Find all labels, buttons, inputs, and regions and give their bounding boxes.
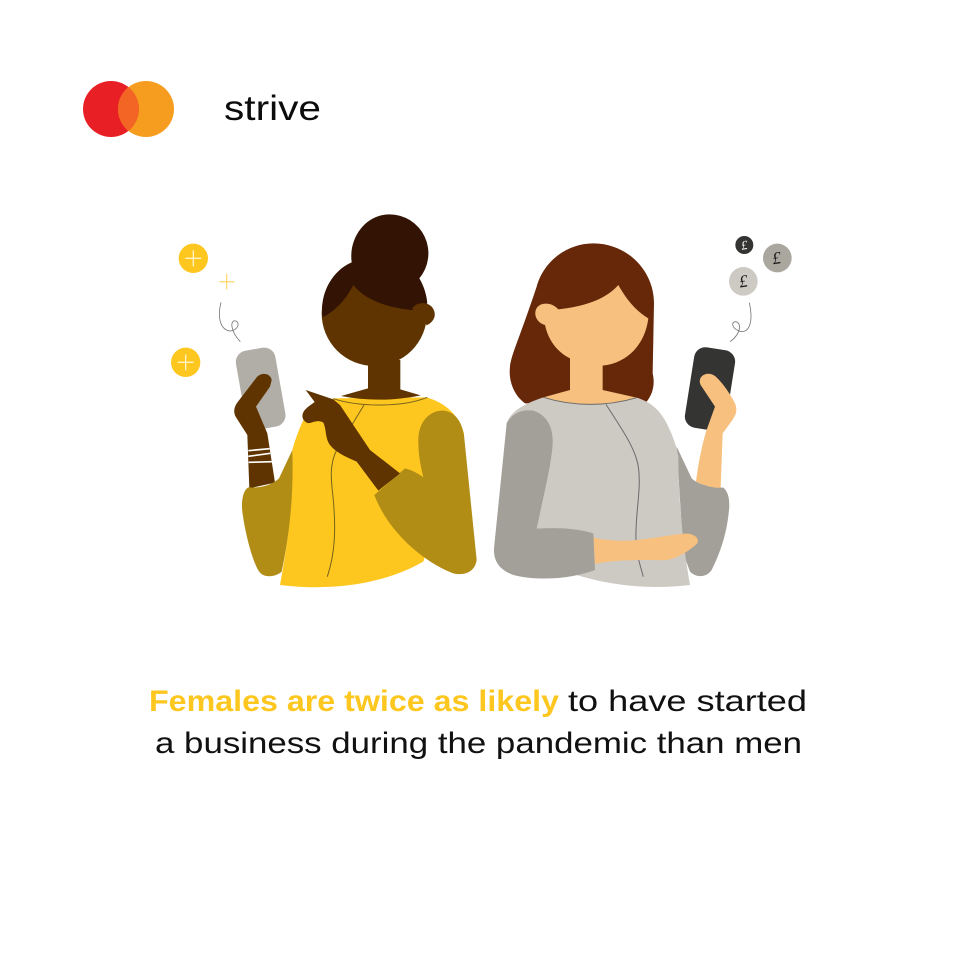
squiggle — [730, 303, 751, 342]
phone — [683, 346, 737, 432]
bracelets — [248, 449, 272, 462]
right sleeve — [677, 447, 729, 576]
raised arm and hand — [696, 374, 736, 488]
neck and shoulders — [341, 360, 421, 400]
face — [535, 285, 648, 366]
neck and shoulders — [543, 353, 637, 404]
blouse seams — [327, 397, 427, 577]
blouse — [280, 397, 464, 587]
squiggle — [219, 302, 240, 342]
hair — [322, 214, 428, 317]
head — [322, 261, 427, 366]
brand name: strive — [224, 89, 321, 128]
neckline and seam — [543, 397, 643, 577]
headline — [149, 685, 807, 760]
right sleeve — [374, 411, 477, 574]
headline line 2: a business during the pandemic than men — [155, 727, 802, 760]
phone — [234, 346, 287, 432]
hand and wrist — [234, 374, 275, 488]
blouse — [507, 397, 690, 587]
pound coins: £ — [740, 238, 749, 253]
left sleeve — [242, 450, 293, 576]
pound coins: £ — [738, 271, 749, 292]
left sleeve — [494, 410, 595, 579]
forearm — [593, 534, 698, 564]
pointing arm — [302, 390, 400, 491]
logo mark — [83, 81, 174, 137]
icon: plus coins — [171, 244, 234, 377]
headline line 1: to have started — [568, 685, 807, 718]
pound coins — [729, 236, 792, 296]
illustration: right woman — [494, 236, 792, 587]
hair — [510, 243, 654, 403]
ear — [412, 303, 435, 325]
pound coins: £ — [771, 248, 783, 268]
illustration: left woman — [171, 214, 477, 587]
headline highlight: Females are twice as likely — [149, 685, 559, 718]
